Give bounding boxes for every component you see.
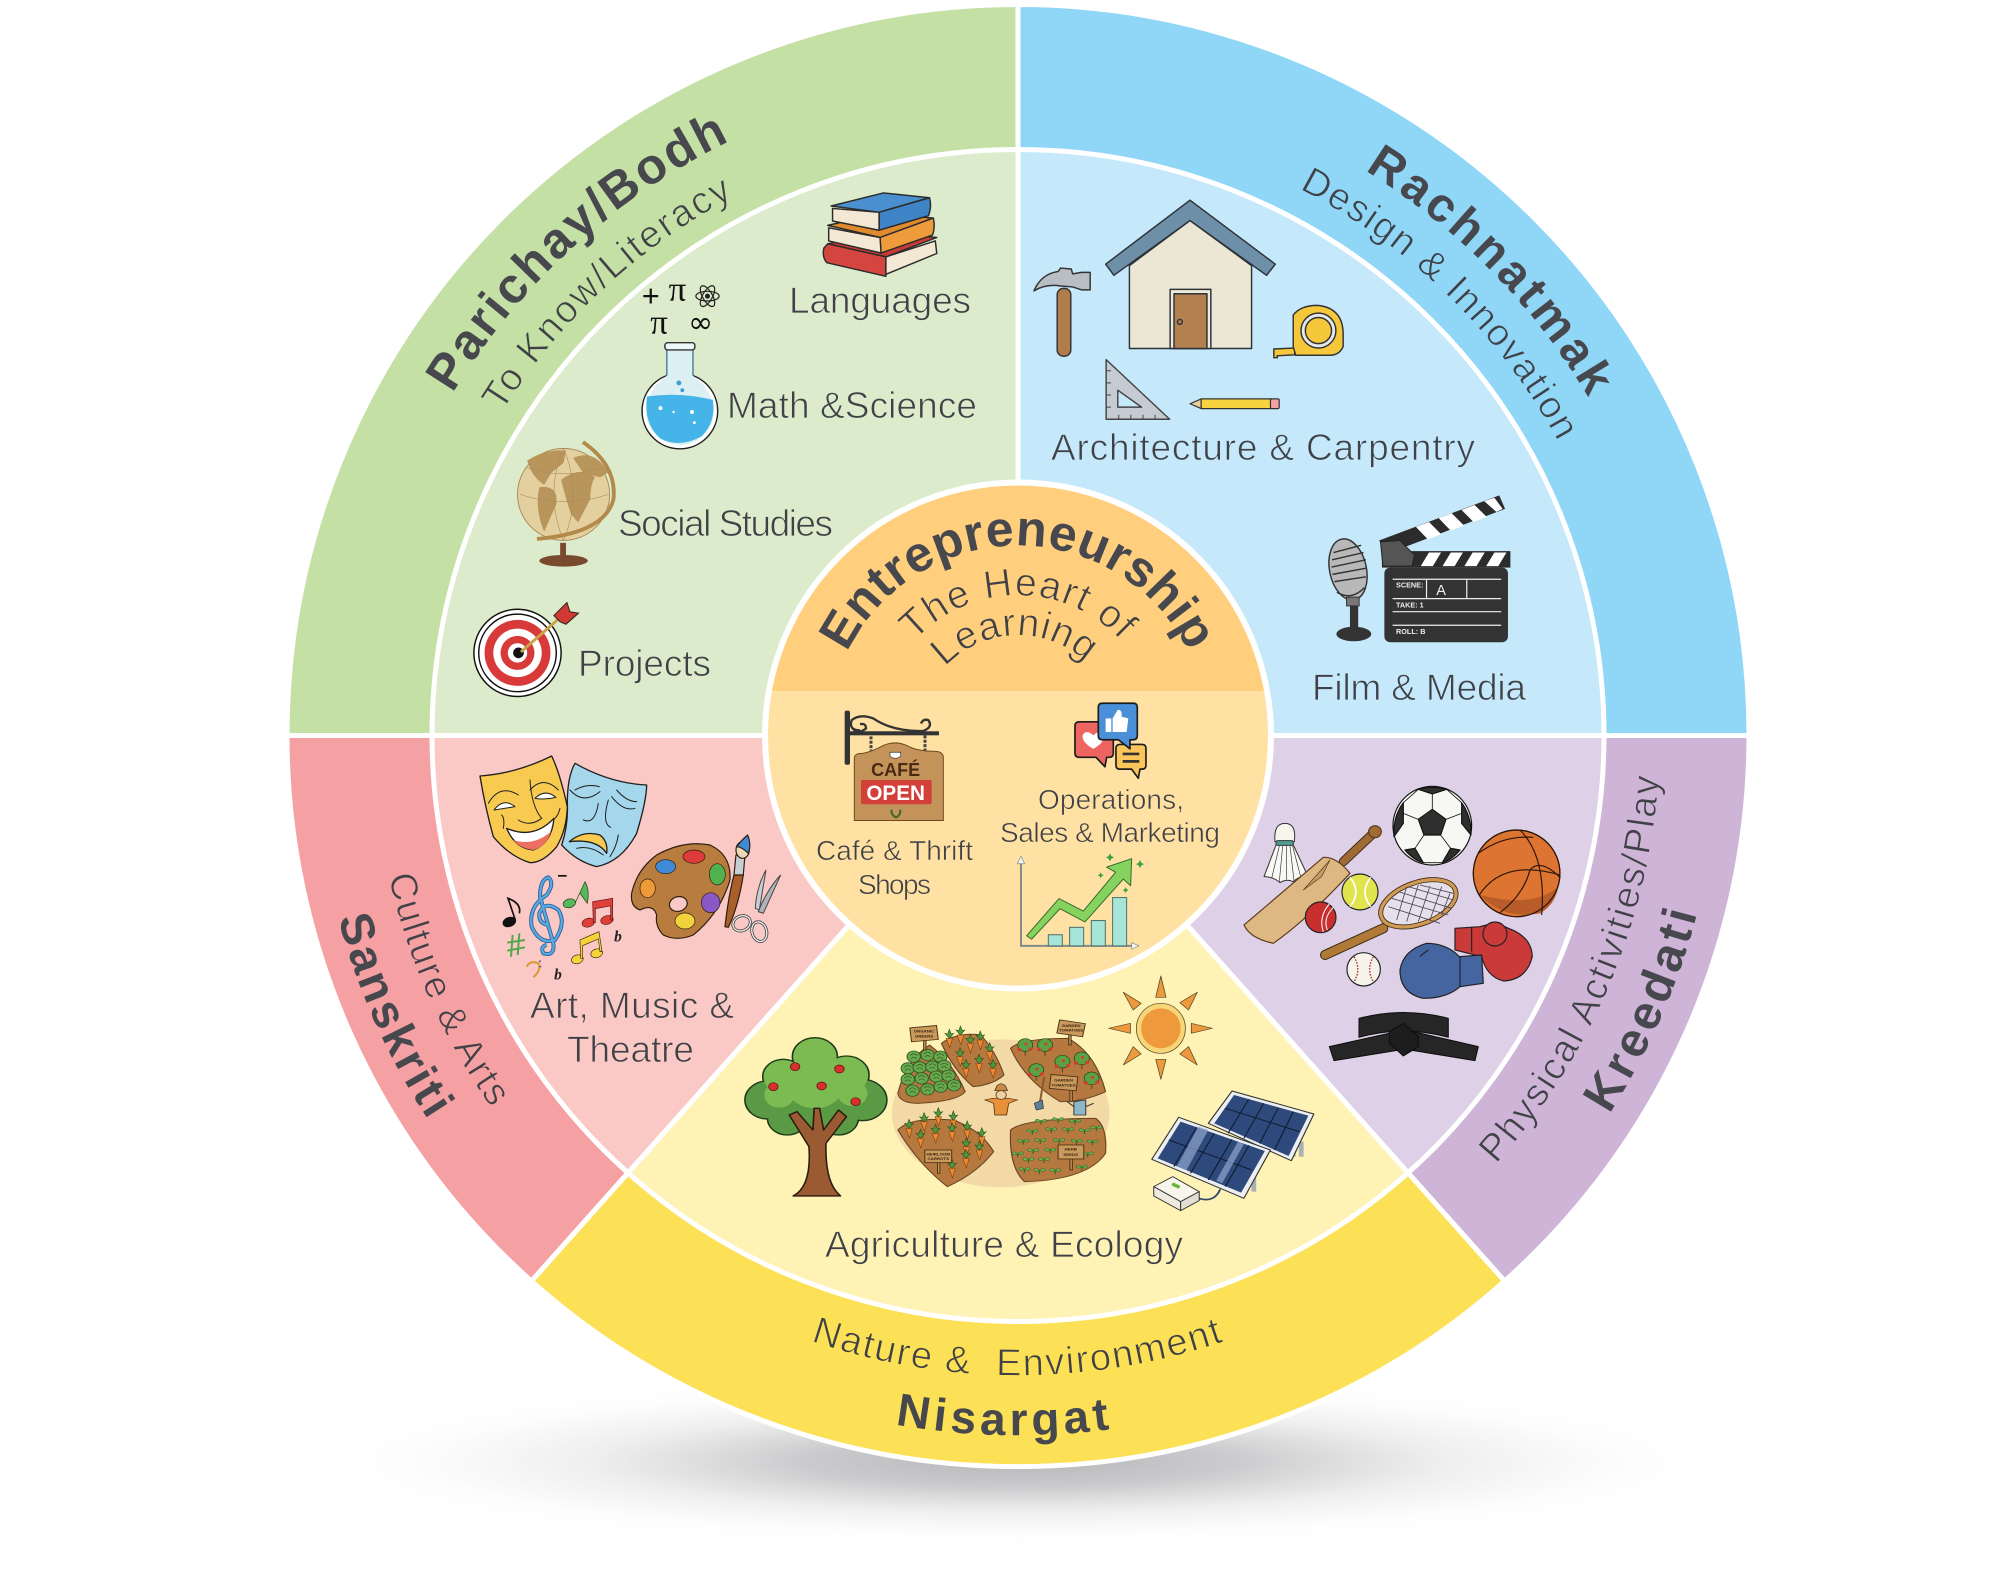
icon: math symbols: ∞ <box>688 306 713 341</box>
icon: shuttlecock <box>1264 823 1307 883</box>
icon: garden plots: TOMATOES <box>1059 1028 1084 1033</box>
icon: scissors <box>730 870 781 943</box>
icon: café open sign <box>845 711 943 821</box>
panel: Kreedati inner <box>1018 736 1604 1173</box>
heading: Kreedati: Kreedati <box>1582 908 1696 1112</box>
subheading: To Know/Literacy: To Know/Literacy <box>481 180 726 404</box>
label: Agriculture & Ecology: Agriculture & Ecology <box>825 1224 1184 1265</box>
heading: Sanskriti: Sanskriti <box>340 914 456 1118</box>
icon: film clapperboard: ROLL: B <box>1396 627 1425 636</box>
icon: microphone <box>1324 535 1372 641</box>
icon: hammer <box>1034 268 1090 356</box>
icon: café open sign: OPEN <box>866 782 925 805</box>
centre title: Entrepreneurship: Entrepreneurship <box>818 518 1208 650</box>
icon: garden plots: HEIRLOOM <box>927 1152 951 1156</box>
heading: Nisargat: Nisargat <box>898 1394 1110 1444</box>
label: Operations,: Operations, <box>1038 784 1184 815</box>
subheading: Design & Innovation: Design & Innovation <box>1302 168 1572 439</box>
icon: apple tree <box>746 1038 886 1196</box>
label: Art, Music &: Art, Music & <box>530 985 734 1026</box>
icon: math symbols: + <box>642 277 660 313</box>
centre subtitle: Learning: Learning <box>930 611 1096 664</box>
label: Theatre: Theatre <box>567 1029 694 1070</box>
icon: garden plots: GREENS <box>915 1034 934 1038</box>
icon: math symbols <box>642 270 719 341</box>
heading: Rachnatmak: Rachnatmak <box>1368 144 1610 397</box>
icon: film clapperboard <box>1379 495 1510 642</box>
icon: soccer ball <box>1393 786 1472 865</box>
icon: boxing gloves <box>1400 922 1532 998</box>
label: Projects: Projects <box>578 643 711 684</box>
icon: math symbols: π <box>650 302 668 341</box>
icon: café open sign: CAFÉ <box>871 759 920 780</box>
icon: globe <box>518 442 614 567</box>
icon: pencil <box>1190 399 1279 409</box>
icon: garden plots: ORGANIC <box>914 1029 934 1034</box>
icon: tennis racket <box>1325 870 1462 955</box>
icon: small balls <box>1305 874 1380 986</box>
subheading: Culture & Arts: Culture & Arts <box>391 874 504 1104</box>
panel: Sanskriti inner <box>432 736 1018 1173</box>
label: Math & Science: Math &Science <box>727 385 977 426</box>
icon: solar panels and battery <box>1152 1091 1314 1211</box>
icon: set square <box>1106 360 1170 419</box>
icon: social media bubbles <box>1075 703 1146 778</box>
subheading: Physical Activities/Play: Physical Activities/Play <box>1478 776 1665 1162</box>
label: Social Studies: Social Studies <box>618 503 833 544</box>
panel: Parichay inner <box>432 150 1018 736</box>
icon: garden plots: TOMATOES <box>1052 1083 1076 1087</box>
label: Film & Media: Film & Media <box>1312 667 1526 708</box>
subheading: Nature & Environment: Nature & Environment <box>814 1318 1223 1376</box>
icon: garden plots: GARDEN <box>1054 1078 1073 1083</box>
label: Shops: Shops <box>858 869 931 900</box>
icon: garden plots: GARDEN <box>1062 1023 1081 1028</box>
icon: music notes: b <box>614 929 622 946</box>
icon: science flask <box>642 343 718 449</box>
panel: Nisargat outer ring <box>531 736 1505 1467</box>
panel: Kreedati outer ring <box>1018 736 1749 1281</box>
chart: growth bars and arrow <box>1017 853 1144 949</box>
icon: sun <box>1109 976 1212 1079</box>
heading: Parichay/Bodh: Parichay/Bodh <box>425 118 727 391</box>
ground shadow <box>303 1378 1733 1546</box>
icon: house <box>1106 200 1275 348</box>
icon: paint palette and brush <box>631 835 750 938</box>
icon: black belt <box>1329 1012 1478 1061</box>
icon: stack of books <box>823 193 937 276</box>
panel: Rachnatmak outer ring <box>1018 4 1749 736</box>
panel: centre circle <box>760 470 1280 988</box>
label: Sales & Marketing: Sales & Marketing <box>1000 817 1220 848</box>
panel: Sanskriti outer ring <box>287 736 1018 1281</box>
panel: Rachnatmak inner <box>1018 150 1604 736</box>
icon: film clapperboard: SCENE: <box>1396 580 1423 589</box>
centre subtitle: The Heart of: The Heart of <box>897 569 1140 637</box>
label: Languages: Languages <box>789 280 971 321</box>
icon: film clapperboard: A <box>1436 583 1446 599</box>
label: Architecture & Carpentry: Architecture & Carpentry <box>1051 427 1476 468</box>
icon: film clapperboard: TAKE: 1 <box>1396 600 1424 609</box>
icon: garden plots: CARROTS <box>928 1156 949 1161</box>
icon: cricket bat <box>1244 826 1381 943</box>
icon: music notes: b <box>554 966 562 983</box>
icon: garden plots <box>892 1020 1109 1187</box>
panel: Parichay/Bodh outer ring <box>287 4 1018 736</box>
icon: measuring tape <box>1274 305 1343 358</box>
icon: basketball <box>1473 830 1560 917</box>
icon: music notes <box>501 875 622 983</box>
icon: math symbols: π <box>669 270 687 309</box>
icon: garden plots: SEEDS <box>1063 1152 1078 1157</box>
icon: garden plots: HERB <box>1065 1147 1077 1152</box>
panel: Nisargat inner <box>628 736 1408 1322</box>
icon: theatre masks <box>480 756 647 867</box>
label: Café & Thrift: Café & Thrift <box>816 835 973 866</box>
icon: target with arrow <box>474 602 579 697</box>
